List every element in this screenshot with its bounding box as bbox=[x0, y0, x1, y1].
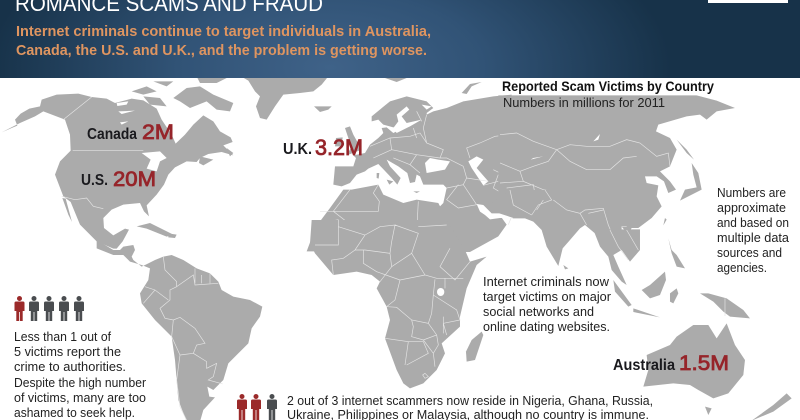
southeast asia and oceania bbox=[593, 229, 792, 420]
note: unreported victims: Despite the high number bbox=[14, 375, 147, 390]
label: united states: 20M bbox=[113, 168, 156, 191]
label: united states: U.S. bbox=[81, 172, 108, 189]
note: where scammers reside: 2 out of 3 internet scammers now reside in Nigeria, Ghana, Russia, bbox=[287, 393, 653, 408]
note: approximate numbers: multiple data bbox=[717, 230, 790, 245]
note: approximate numbers: approximate bbox=[717, 200, 786, 215]
note: unreported victims: ashamed to seek help. bbox=[14, 405, 135, 420]
chart heading bbox=[502, 78, 714, 110]
note: unreported victims: Less than 1 out of bbox=[14, 329, 111, 344]
label: canada: 2M bbox=[142, 121, 174, 144]
label: canada: Canada bbox=[87, 126, 137, 143]
label: australia: Australia bbox=[613, 357, 675, 374]
note: social networks bbox=[483, 274, 612, 334]
note: social networks: social networks and bbox=[483, 304, 594, 319]
label: united kingdom bbox=[283, 135, 363, 160]
india and arabian sea bbox=[477, 190, 622, 269]
note: where scammers reside bbox=[287, 393, 653, 420]
note: unreported victims: of victims, many are too bbox=[14, 390, 146, 405]
africa north bbox=[307, 185, 463, 251]
label: united kingdom: 3.2M bbox=[315, 135, 363, 160]
note: social networks: Internet criminals now bbox=[483, 274, 610, 289]
icon: one of five people bbox=[14, 296, 84, 321]
note: approximate numbers: and based on bbox=[717, 215, 789, 230]
africa south bbox=[310, 220, 487, 388]
note: approximate numbers: Numbers are bbox=[717, 185, 786, 200]
chart heading: Reported Scam Victims by Country bbox=[502, 78, 714, 94]
logo box bbox=[708, 0, 788, 3]
label: canada bbox=[87, 121, 174, 144]
header banner bbox=[0, 0, 800, 78]
label: united states bbox=[81, 168, 156, 191]
note: unreported victims: 5 victims report the bbox=[14, 344, 121, 359]
note: social networks: online dating websites. bbox=[483, 319, 610, 334]
russia, china and east asia bbox=[498, 95, 735, 237]
note: social networks: target victims on major bbox=[483, 289, 612, 304]
subtitle bbox=[16, 23, 431, 59]
note: approximate numbers bbox=[717, 185, 790, 275]
note: approximate numbers: sources and bbox=[717, 245, 782, 260]
label: australia bbox=[613, 352, 729, 375]
subtitle: Internet criminals continue to target individuals in Australia, bbox=[16, 23, 431, 40]
note: unreported victims: crime to authorities. bbox=[14, 359, 126, 374]
south america bbox=[97, 240, 262, 420]
greenland and iceland bbox=[241, 76, 407, 120]
note: approximate numbers: agencies. bbox=[717, 260, 767, 275]
note: unreported victims bbox=[14, 329, 147, 420]
europe, middle east and west asia bbox=[333, 82, 512, 252]
icon: two of three people bbox=[237, 394, 277, 420]
north america bbox=[2, 76, 233, 249]
subtitle: Canada, the U.S. and U.K., and the problem is getting worse. bbox=[16, 42, 427, 59]
label: australia: 1.5M bbox=[679, 352, 729, 375]
label: united kingdom: U.K. bbox=[283, 141, 312, 158]
chart heading: Numbers in millions for 2011 bbox=[503, 96, 665, 110]
